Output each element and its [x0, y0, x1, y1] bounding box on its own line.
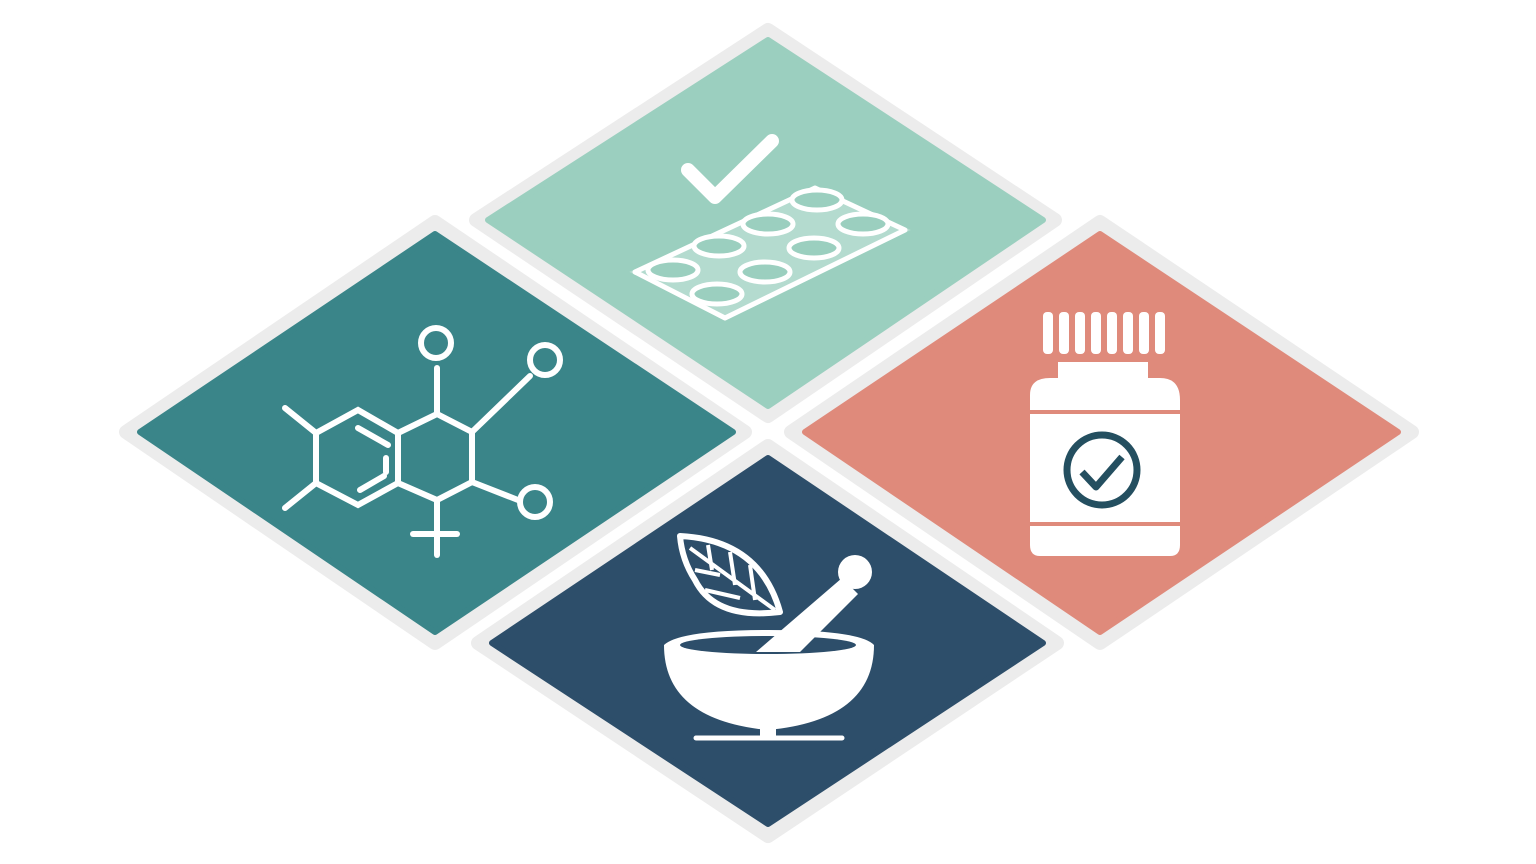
panel: bottom navy diamond	[478, 446, 1057, 836]
panel: right salmon diamond	[791, 222, 1412, 643]
panel: top mint diamond	[476, 30, 1055, 416]
icon: mortar and pestle with leaf	[664, 536, 874, 738]
icon: molecule	[285, 328, 560, 555]
icon: blister pack	[635, 188, 905, 318]
icon: pill bottle	[1030, 312, 1180, 556]
icon: checkmark	[688, 141, 772, 197]
panel: left teal diamond	[126, 222, 745, 643]
